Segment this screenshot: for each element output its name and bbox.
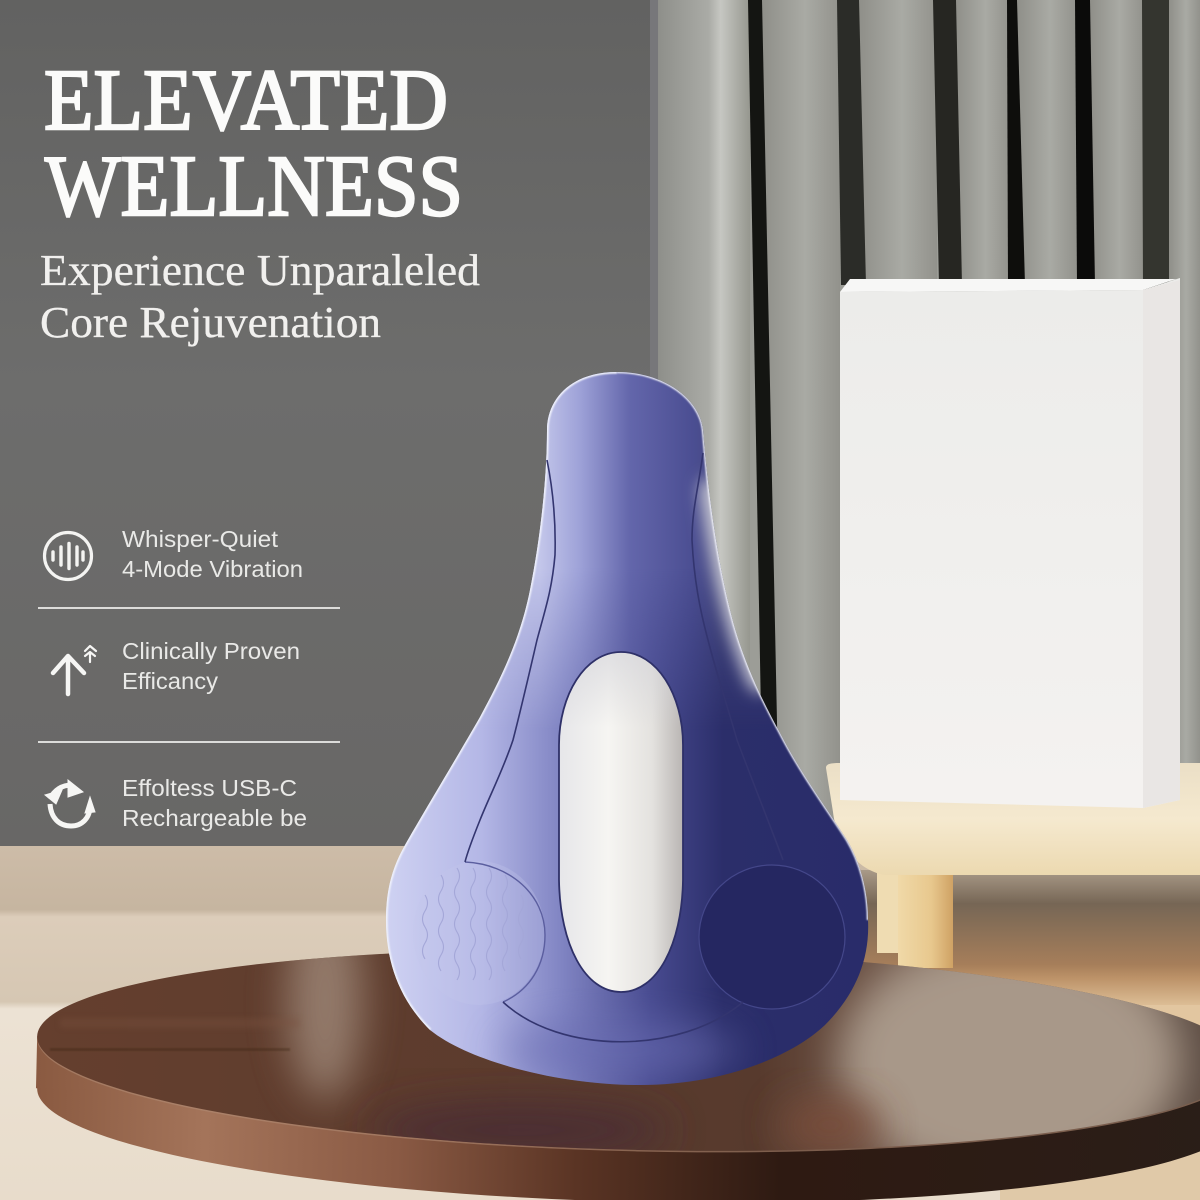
feature text: USB-C — [122, 775, 307, 831]
round walnut table — [36, 954, 1200, 1200]
feature text: USB-C: Effoltess USB-C — [122, 775, 297, 801]
product: purple core massager — [380, 370, 880, 1085]
divider — [38, 741, 340, 743]
feature text: vibration: 4-Mode Vibration — [122, 556, 303, 582]
white centre pad — [559, 652, 683, 992]
background: grey wall — [0, 0, 660, 850]
wooden stool — [826, 763, 1200, 968]
white product box — [840, 278, 1180, 808]
feature text: efficacy: Efficancy — [122, 668, 219, 694]
icon: recharge cycle arrows — [45, 780, 95, 826]
right smooth circle — [699, 865, 845, 1009]
icon: up arrow — [53, 646, 96, 694]
title — [44, 51, 463, 234]
feature text: vibration — [122, 526, 303, 582]
background: wooden floor — [0, 846, 1200, 1200]
feature text: vibration: Whisper-Quiet — [122, 526, 279, 552]
subtitle: Core Rejuvenation — [40, 298, 381, 347]
left textured circle — [413, 861, 545, 1005]
icon: sound wave in circle — [44, 532, 92, 580]
feature text: efficacy: Clinically Proven — [122, 638, 300, 664]
seam lines — [465, 453, 783, 1042]
background: vertical slat panels — [650, 0, 1200, 860]
subtitle — [40, 246, 480, 347]
massager body — [386, 372, 868, 1085]
title: WELLNESS — [45, 137, 463, 234]
feature text: USB-C: Rechargeable be — [122, 805, 307, 831]
feature text: efficacy — [122, 638, 300, 694]
divider — [38, 607, 340, 609]
body shading — [380, 370, 880, 1078]
subtitle: Experience Unparaleled — [40, 246, 480, 295]
title: ELEVATED — [44, 51, 448, 148]
